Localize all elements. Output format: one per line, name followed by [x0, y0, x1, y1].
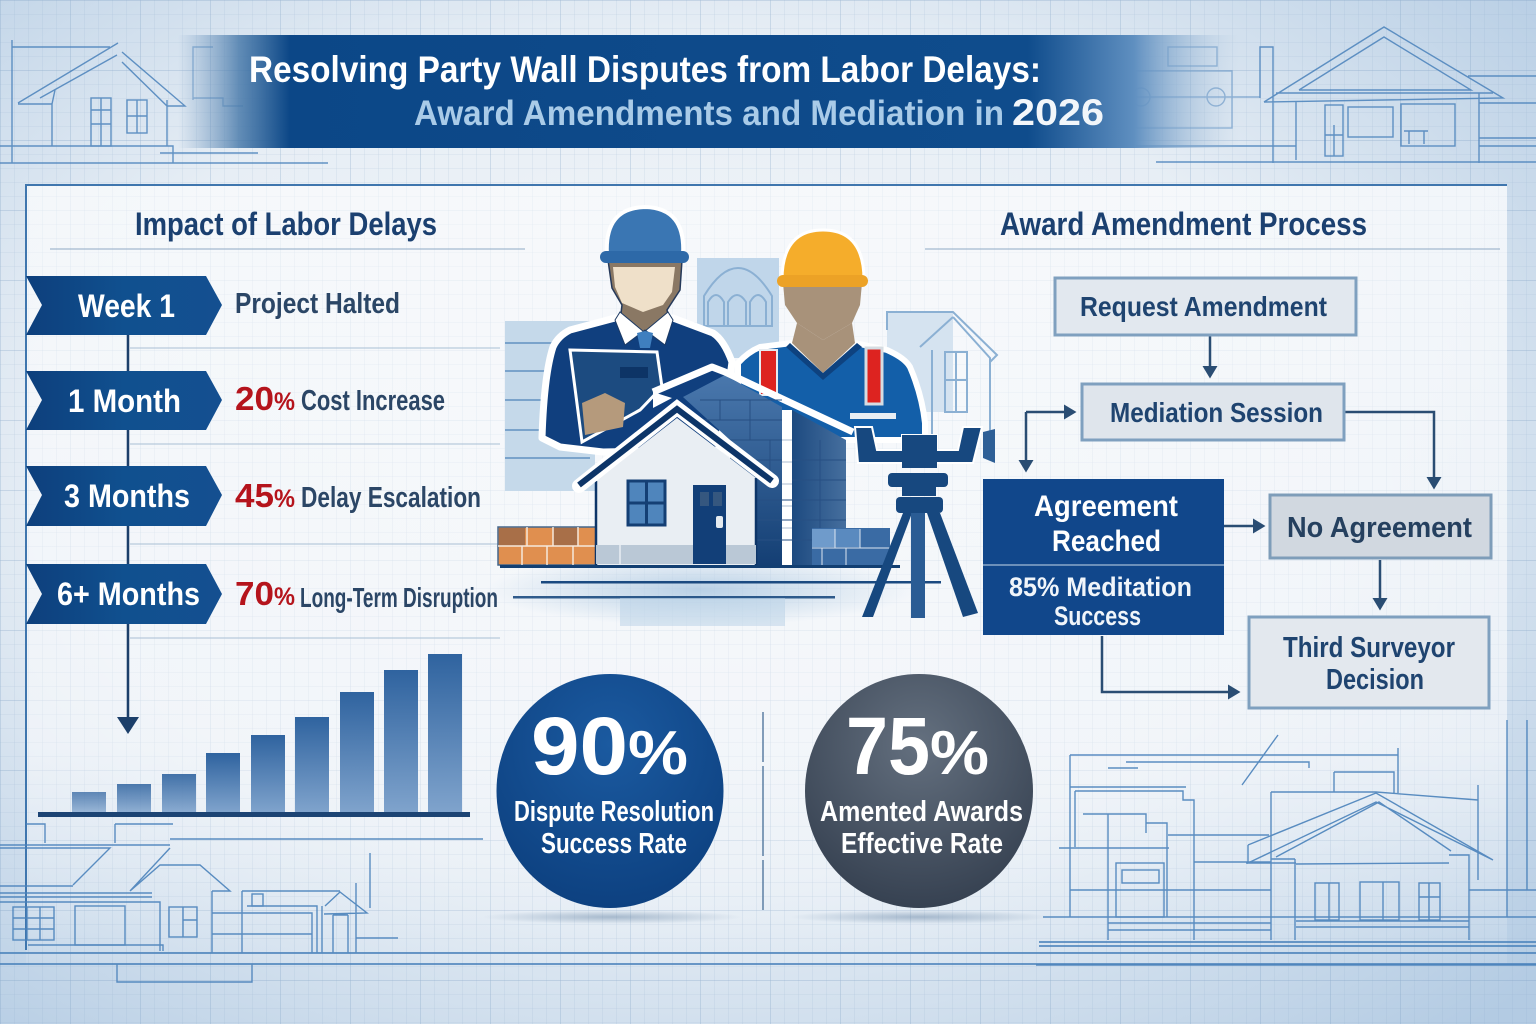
row: week 1: Project Halted	[235, 288, 400, 320]
heading: impact of labor delays: Impact of Labor Delays	[135, 206, 437, 242]
row: 1 month: 1 Month	[68, 383, 181, 419]
row: 1 month: Cost Increase	[301, 385, 445, 417]
house and brick wall	[485, 367, 941, 626]
row: 6+ months	[26, 564, 500, 638]
stat: 75 percent: 75	[846, 701, 930, 792]
box: third surveyor decision: Decision	[1326, 664, 1424, 696]
stat: 90 percent	[482, 674, 742, 924]
timeline connector arrow	[127, 330, 129, 725]
main panel	[26, 185, 1507, 965]
row: 3 months	[26, 466, 500, 544]
row: 6+ months: 70	[235, 575, 274, 612]
row: 1 month	[26, 371, 500, 444]
row: 3 months: %	[274, 485, 295, 513]
row: 1 month: 20	[235, 380, 274, 417]
stat: 90 percent: %	[628, 719, 688, 788]
divider between stats	[762, 712, 764, 910]
box: third surveyor decision	[1249, 617, 1489, 708]
box: mediation session: Mediation Session	[1110, 397, 1323, 428]
stat: 90 percent: Success Rate	[541, 828, 687, 860]
box: agreement reached	[983, 479, 1224, 635]
box: agreement reached: Reached	[1052, 525, 1161, 558]
row: week 1	[26, 276, 500, 348]
bar chart	[38, 654, 470, 817]
row: 6+ months: %	[274, 583, 295, 611]
box: no agreement: No Agreement	[1287, 512, 1472, 544]
stat: 90 percent: 90	[531, 701, 628, 792]
box: mediation session	[1082, 384, 1344, 440]
box: no agreement	[1270, 495, 1491, 558]
sketch: house bottom left	[0, 824, 1536, 982]
stat: 90 percent: Dispute Resolution	[514, 796, 714, 828]
title banner	[178, 35, 1240, 148]
surveyor right	[738, 230, 925, 440]
box: agreement reached: 85% Meditation	[1009, 572, 1192, 602]
box: request amendment	[1055, 278, 1356, 335]
row: week 1: Week 1	[78, 288, 175, 324]
row: 6+ months: Long-Term Disruption	[300, 582, 498, 613]
title banner: Resolving Party Wall Disputes from Labor Delays:	[249, 49, 1041, 90]
stat: 75 percent	[790, 674, 1050, 924]
title banner: Award Amendments and Mediation in	[414, 94, 1004, 133]
sketch: house bottom right	[1036, 720, 1536, 965]
stat: 75 percent: Effective Rate	[841, 828, 1003, 860]
stat: 75 percent: %	[930, 719, 989, 788]
row: 3 months: Delay Escalation	[301, 482, 481, 514]
sketch: house top right	[1132, 27, 1536, 163]
timeline arrow head	[117, 717, 139, 734]
row: 1 month: %	[274, 388, 295, 416]
flowchart connectors	[1026, 336, 1434, 692]
illustration: surveyors, house and theodolite	[485, 207, 997, 626]
box: third surveyor decision: Third Surveyor	[1283, 632, 1455, 664]
heading: award amendment process: Award Amendment Process	[1000, 206, 1367, 242]
title banner: 2026	[1012, 92, 1104, 133]
theodolite on tripod	[855, 427, 995, 618]
faded blueprint backdrop	[505, 258, 997, 491]
sketch: house top left	[0, 40, 328, 163]
box: agreement reached: Success	[1054, 601, 1141, 631]
stat: 75 percent: Amented Awards	[820, 796, 1023, 828]
row: 6+ months: 6+ Months	[57, 576, 200, 612]
surveyor left	[542, 207, 732, 452]
box: agreement reached: Agreement	[1034, 490, 1178, 523]
row: 3 months: 3 Months	[64, 478, 190, 514]
row: 3 months: 45	[235, 477, 274, 514]
box: request amendment: Request Amendment	[1080, 291, 1327, 322]
